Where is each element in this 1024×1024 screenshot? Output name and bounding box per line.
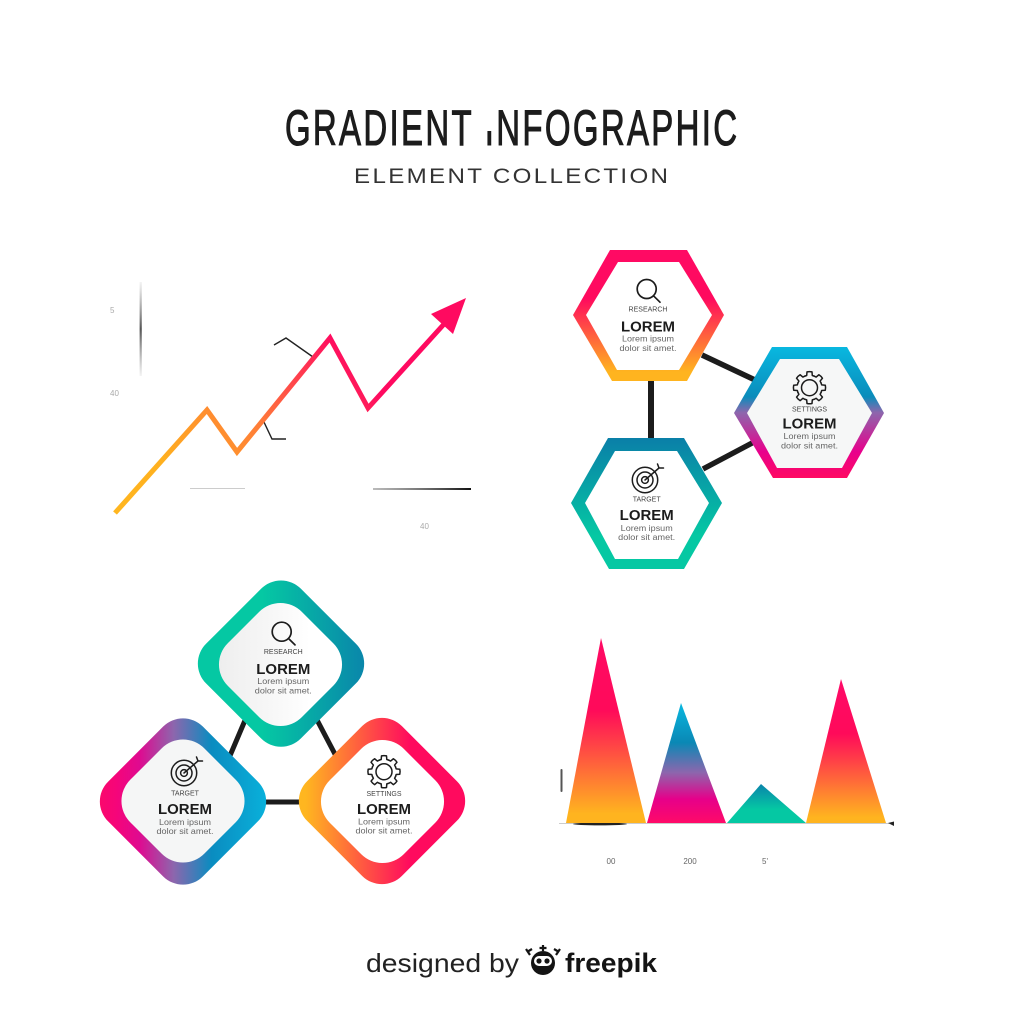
hexagon: target: Lorem ipsum	[621, 523, 673, 533]
hexagon: settings	[734, 347, 884, 478]
x axis labels	[607, 857, 768, 866]
hexagon: target: dolor sit amet.	[618, 532, 675, 542]
triangle 2	[647, 703, 726, 823]
diamond: settings: Lorem ipsum	[358, 816, 410, 826]
faded axes	[140, 282, 471, 490]
diamond: target: dolor sit amet.	[156, 826, 214, 836]
hexagon: research: LOREM	[621, 320, 675, 336]
axis labels: 40	[420, 522, 429, 531]
triangle 4	[806, 679, 886, 823]
hexagon: settings: SETTINGS	[792, 407, 827, 414]
callout leader lines	[263, 338, 313, 439]
icon: freepik mascot	[526, 945, 560, 975]
subtitle: ELEMENT COLLECTION	[354, 164, 668, 188]
diamond: research: dolor sit amet.	[255, 686, 312, 696]
diamond: settings: SETTINGS	[366, 791, 402, 798]
diamond: research: Lorem ipsum	[257, 676, 309, 686]
axis labels: 40	[110, 389, 119, 398]
connectors	[229, 718, 337, 802]
diamond: research: RESEARCH	[264, 649, 303, 656]
triangle bar chart panel	[559, 638, 894, 866]
credit text: designed by	[366, 948, 519, 978]
arrow head	[431, 298, 466, 334]
x axis labels: 00	[607, 857, 616, 866]
hexagon: target: TARGET	[633, 497, 661, 504]
x axis labels: 5'	[762, 857, 768, 866]
hexagon: research: RESEARCH	[629, 306, 667, 314]
footer credit	[366, 945, 658, 978]
diamond: research: LOREM	[256, 662, 310, 678]
hexagon network panel	[571, 250, 884, 569]
rising zigzag line	[115, 323, 445, 513]
axis labels: 5	[110, 306, 115, 315]
axis labels	[110, 306, 429, 531]
hexagon: settings: Lorem ipsum	[784, 431, 836, 441]
hexagon: settings: LOREM	[782, 416, 836, 432]
hexagon: target: LOREM	[620, 508, 674, 524]
diamond: research	[186, 569, 376, 758]
connectors	[651, 355, 755, 469]
diamond: target: Lorem ipsum	[159, 817, 211, 827]
diamond: target	[88, 707, 278, 896]
diamond: settings	[287, 706, 477, 896]
diamond: target: TARGET	[171, 790, 200, 798]
line chart panel	[110, 282, 471, 531]
brand name: freepik	[565, 948, 658, 978]
diamond network panel	[88, 569, 477, 896]
diamond: settings: LOREM	[357, 802, 411, 818]
hexagon: research: dolor sit amet.	[620, 343, 676, 353]
triangle 3	[727, 784, 806, 823]
hexagon: target	[571, 438, 722, 569]
hexagon: research: Lorem ipsum	[622, 334, 674, 344]
title: GRADIENT INFOGRAPHIC	[285, 100, 737, 156]
x axis labels: 200	[683, 857, 697, 866]
diamond: target: LOREM	[158, 802, 212, 818]
hexagon: research	[573, 250, 724, 381]
hexagon: settings: dolor sit amet.	[781, 441, 838, 451]
axis remnants	[559, 769, 894, 826]
triangle 1	[566, 638, 646, 823]
diamond: settings: dolor sit amet.	[356, 826, 412, 836]
